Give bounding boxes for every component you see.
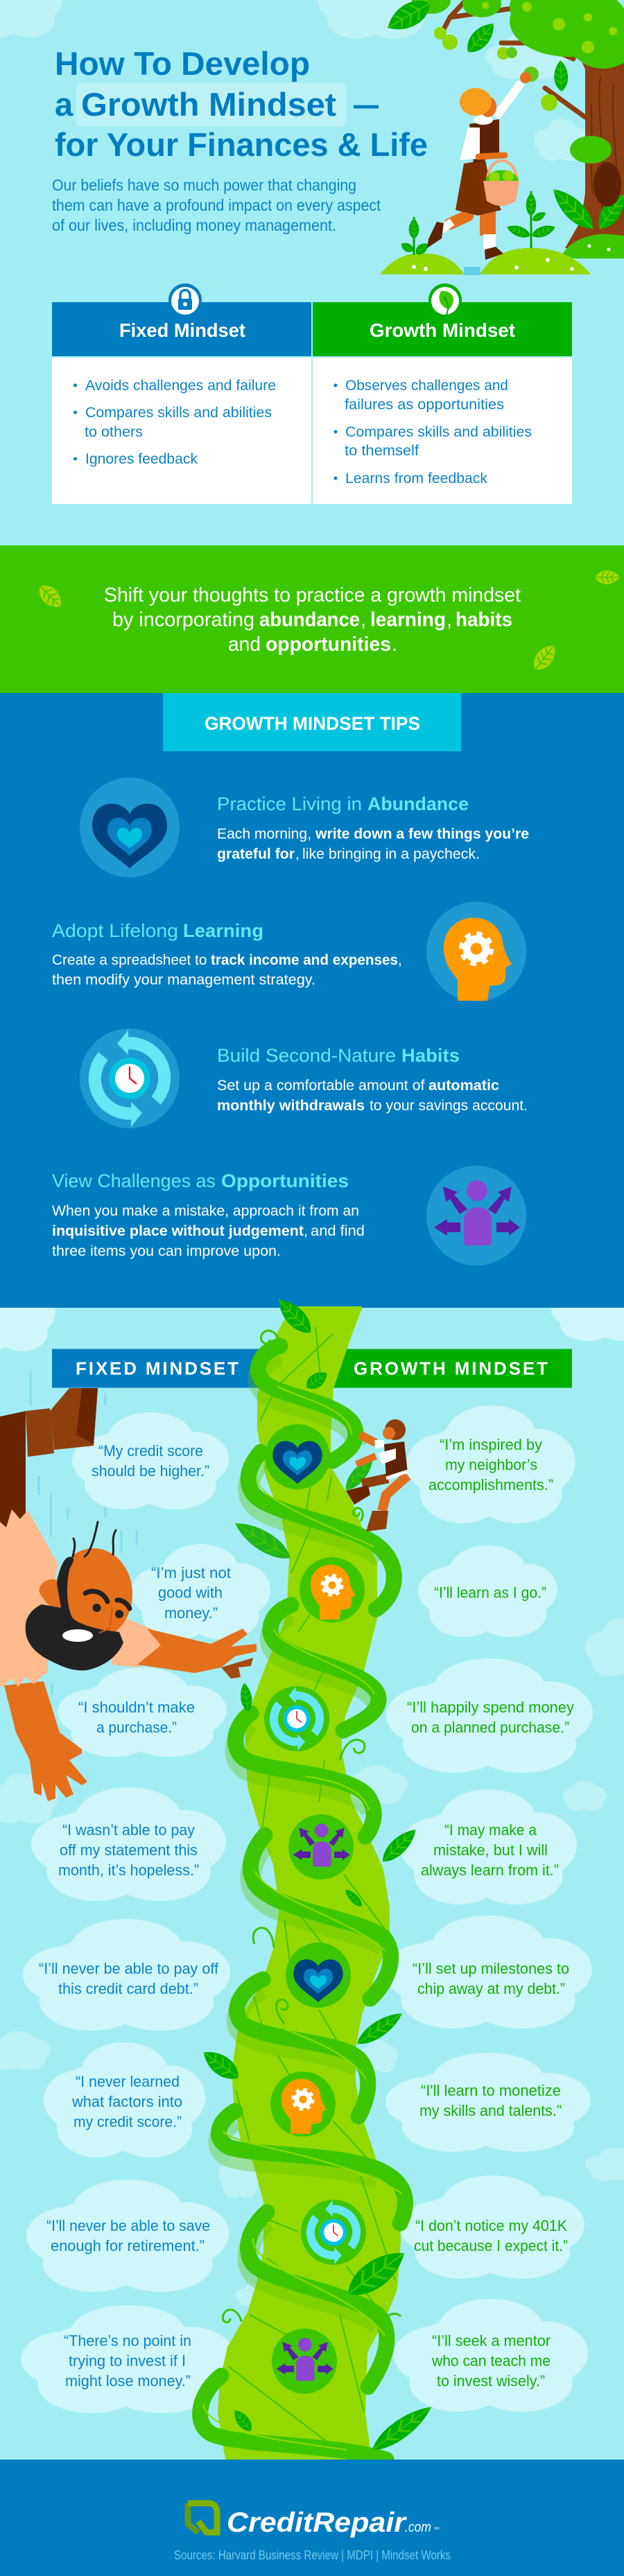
bullet list: Avoids challenges and failure [85,378,276,394]
bullet list [334,378,532,487]
quote: always learn from it.” [421,1861,559,1879]
illustration: falling man [0,1372,257,1801]
icon: leaf [428,283,462,317]
quote [23,1919,230,2031]
tip: learning [52,902,526,1001]
stalk [219,1308,399,2460]
tip: opportunities: When you make a mistake, approach it from an [52,1203,359,1219]
quote: mistake, but I will [433,1841,548,1859]
quote: who can teach me [431,2352,551,2369]
stalk icon: head with gear [300,1557,365,1622]
stalk icon: clock [264,1686,329,1751]
quote: what factors into [71,2093,182,2110]
illustration: climbing boy [346,1419,408,1532]
quote [131,1544,270,1640]
quote: “I’ll set up milestones to [413,1960,569,1977]
quote: month, it’s hopeless.” [58,1861,199,1879]
stalk veins [229,1327,395,2446]
tip: opportunities: inquisitive place without judgement [52,1223,304,1239]
vines [200,1346,406,2460]
lower hand [4,1681,87,1801]
girl [427,72,531,260]
tip: habits: Habits [401,1045,460,1066]
beanstalk [198,1293,437,2460]
banner text: by incorporating [112,608,254,631]
icon: lock [168,283,202,317]
quote: accomplishments.” [428,1476,553,1493]
tree branches [444,0,585,117]
sapling plants [399,191,557,257]
footer [0,2460,624,2576]
banner text: Shift your thoughts to practice a growth mindset [104,584,521,606]
quote: “I’m just not [151,1564,231,1581]
intro paragraph: them can have a profound impact on every aspect [52,196,381,214]
background clouds top [0,0,589,161]
section: top background [0,0,624,546]
tip: habits: monthly withdrawals [217,1098,365,1114]
tip: learning: track income and expenses [211,952,398,968]
quote: “I’ll never be able to save [46,2217,210,2234]
quote clouds: fixed mindset [21,1412,270,2413]
quote [386,1658,593,1773]
intro paragraph: Our beliefs have so much power that changing [52,176,356,194]
section: beanstalk background [0,1308,624,2460]
quote: trying to invest if I [69,2352,186,2369]
icon: person with arrows [426,1166,526,1265]
quote: cut because I expect it.” [414,2237,568,2254]
banner text: . [392,633,397,656]
quote [31,1787,226,1901]
tip: habits: Build Second-Nature [217,1045,396,1066]
bullet list: Ignores feedback [85,451,198,467]
tip: learning: Adopt Lifelong [52,920,178,941]
quote [72,1412,229,1509]
bullet list: to others [85,424,143,440]
tip: opportunities [52,1166,526,1265]
tip: habits [80,1028,528,1128]
title: Growth Mindset [81,86,336,123]
quote: my skills and talents.” [419,2102,562,2119]
logo mark [188,2503,217,2532]
quote [385,2053,591,2152]
quote [400,2175,584,2279]
quote: enough for retirement.” [51,2237,205,2254]
quote: “I’ll never be able to pay off [39,1960,219,1977]
quote: my neighbor’s [445,1456,537,1473]
tip: opportunities: and find [311,1223,365,1239]
quote: “My credit score [98,1442,203,1460]
banner leaves [35,570,620,674]
tip: learning: Learning [183,920,263,941]
quote: money.” [164,1604,218,1622]
stalk leaves [198,1293,437,2457]
quote [26,2180,229,2292]
tree leaves [382,0,624,236]
banner text: habits [456,608,512,631]
stalk icon: heart [286,1943,351,2008]
banner text: learning [370,608,446,631]
banner text [104,584,521,656]
quote: on a planned purchase.” [411,1719,569,1736]
vine shadow [218,1356,383,2324]
quote [21,2305,235,2413]
logo wordmark: CreditRepair [227,2507,408,2538]
quote [418,1545,557,1637]
tip: habits: Set up a comfortable amount of [217,1078,425,1094]
tree side bush [570,136,621,207]
quote: off my statement this [60,1841,198,1859]
tip: abundance: write down a few things you’re [315,826,529,842]
logo wordmark: SM [434,2527,440,2531]
trousers and boot [0,1388,98,1527]
icon: clock with arrows [80,1028,180,1128]
stalk icon: person [288,1814,354,1880]
quote: “I wasn’t able to pay [62,1821,195,1839]
motion lines [31,1372,137,1694]
tip: learning: then modify your management strategy. [52,972,315,988]
torn shirt [0,1509,58,1687]
tree canopy [412,0,624,69]
bullet list [73,378,276,467]
quote: “I don’t notice my 401K [415,2217,567,2234]
quote: “I’m inspired by [440,1436,542,1453]
quote clouds: growth mindset [384,1405,593,2412]
banner text: , [447,608,452,631]
quote [384,1916,592,2029]
title: for Your Finances & Life [55,126,428,163]
tip: abundance: like bringing in a paycheck. [302,846,480,862]
bullet list: to themself [345,443,419,459]
quote [406,1405,575,1523]
quote [400,1789,577,1904]
tip: opportunities: View Challenges as [52,1171,216,1191]
apples [434,27,557,111]
quote: “I’ll learn as I go.” [434,1584,546,1601]
quote [394,2299,588,2412]
quote: a purchase.” [96,1719,177,1736]
basket of apples [483,161,519,206]
tip: abundance: Each morning, [217,826,311,842]
title [55,45,428,163]
header bar: growth mindset: GROWTH MINDSET [354,1358,548,1379]
intro paragraph [52,176,381,234]
stalk icon: heart [265,1424,330,1489]
quote: should be higher.” [92,1462,209,1480]
banner text: and [228,633,261,656]
tip: opportunities: three items you can improve upon. [52,1243,281,1259]
heading: Growth Mindset [370,319,515,341]
reaching arm [111,1615,257,1679]
heading: Fixed Mindset [119,319,245,341]
illustration: tree and girl picking apples [380,0,624,275]
quote: “I’ll seek a mentor [432,2332,551,2349]
stalk icon: clock [301,2200,366,2265]
tip: abundance: grateful for [217,846,295,862]
tip: abundance: , [295,846,300,862]
quote: my credit score.” [73,2113,182,2130]
bullet list: Observes challenges and [345,378,508,394]
title: — [354,86,379,123]
icon: head with gear [426,902,526,1001]
tip: abundance: Practice Living in [217,794,362,814]
tree trunk [565,21,624,248]
tip: habits: to your savings account. [370,1098,528,1114]
banner text: , [361,608,366,631]
banner text: opportunities [266,633,391,656]
tip: learning: Create a spreadsheet to [52,952,207,968]
quote: “I'll learn to monetize [421,2082,561,2099]
bullet list: Learns from feedback [345,471,488,487]
tip: abundance: Abundance [367,794,469,814]
banner text: abundance [259,608,360,631]
tips heading: GROWTH MINDSET TIPS [205,713,420,734]
title: How To Develop [55,45,310,82]
tip: opportunities: Opportunities [221,1171,349,1191]
ground bushes [380,234,624,275]
panel: green banner [0,545,624,693]
quote: “I may make a [444,1821,537,1839]
quote: chip away at my debt.” [417,1980,565,1997]
tips heading [163,693,461,751]
quote: might lose money.” [65,2372,191,2390]
title highlight [76,83,346,126]
header bar: fixed mindset: FIXED MINDSET [76,1358,239,1379]
background clouds lower [0,1275,624,2306]
quote: “I’ll happily spend money [407,1699,574,1716]
panel: growth mindset tips [0,693,624,1308]
sources: Sources: Harvard Business Review | MDPI | Mindset Works [174,2548,451,2562]
tip: opportunities: , [304,1223,308,1239]
quote: this credit card debt.” [58,1980,198,1997]
stalk icon: head with gear [270,2071,336,2137]
quote [58,1667,227,1757]
bullet list: Compares skills and abilities [345,424,532,440]
head [26,1522,132,1670]
panel: growth mindset [313,283,572,504]
tendrils [223,1331,401,2322]
quote [44,2042,205,2157]
vine highlights [203,1386,402,2450]
header bar: fixed mindset [52,1349,267,1387]
quote: good with [158,1584,223,1601]
icon: heart [80,778,180,877]
title: a [55,86,73,123]
logo wordmark: .com [405,2520,431,2535]
tip: learning: , [398,952,402,968]
quote: to invest wisely.” [437,2372,545,2390]
stalk icon: person [272,2329,337,2394]
quote: “I never learned [76,2073,180,2090]
bullet list: failures as opportunities [345,396,504,413]
quote: “There’s no point in [64,2332,191,2349]
quote: “I shouldn’t make [78,1699,195,1716]
panel: fixed mindset [52,283,311,504]
intro paragraph: of our lives, including money management. [52,216,336,234]
tip: habits: automatic [428,1078,499,1094]
header bar: growth mindset [326,1349,572,1387]
tip: abundance [80,778,529,877]
bullet list: Compares skills and abilities [85,405,272,421]
